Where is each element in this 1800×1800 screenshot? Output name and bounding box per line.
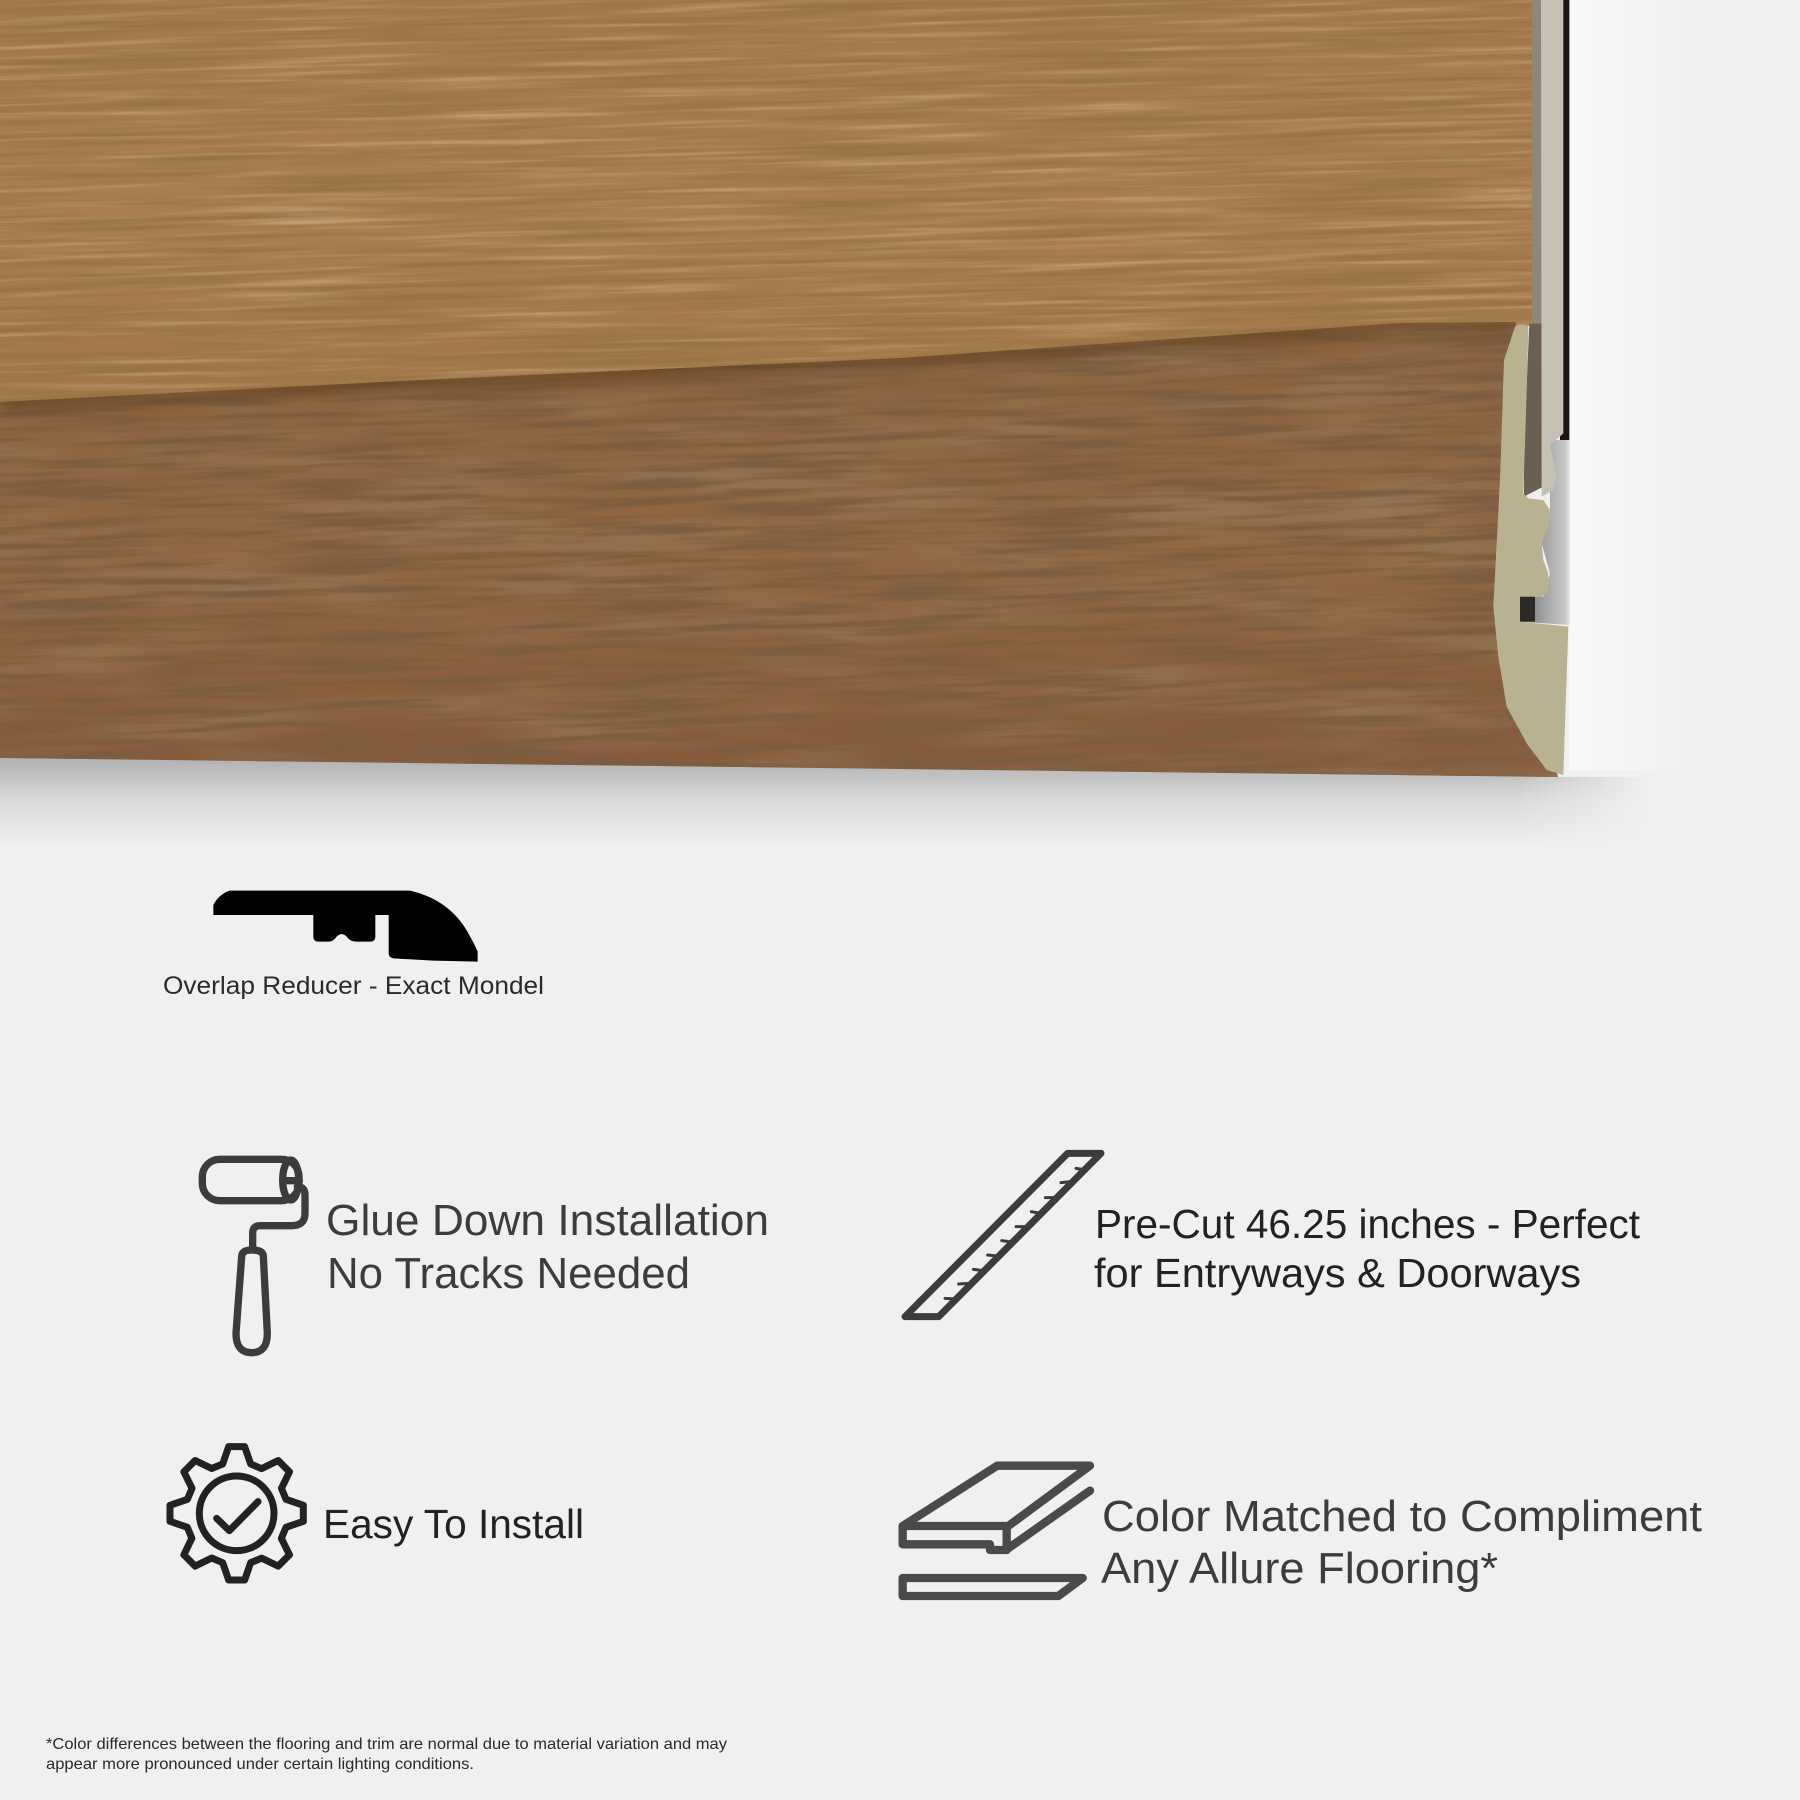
- trim end cut: [1493, 324, 1568, 775]
- photo backdrop light and shadow: [0, 323, 1627, 830]
- feature text: glue down: Glue Down Installation: [326, 1196, 769, 1245]
- feature text: pre-cut: Pre-Cut 46.25 inches - Perfect: [1095, 1201, 1641, 1247]
- feature text: glue down: No Tracks Needed: [327, 1249, 690, 1298]
- feature text: easy install: Easy To Install: [323, 1501, 584, 1547]
- footnote: *Color differences between the flooring and trim are normal due to material variation and may: [46, 1736, 727, 1753]
- feature text: color matched: Any Allure Flooring*: [1101, 1544, 1498, 1593]
- feature text: pre-cut: for Entryways & Doorways: [1094, 1250, 1581, 1296]
- footnote: [46, 1736, 727, 1773]
- plank edge profile: [1520, 0, 1570, 625]
- feature text: color matched: [1101, 1492, 1702, 1593]
- icon: overlap reducer profile: [213, 891, 478, 962]
- icon: ruler: [905, 1153, 1101, 1317]
- icon: paint roller: [202, 1159, 305, 1353]
- profile caption: Overlap Reducer - Exact Mondel: [163, 972, 544, 1000]
- upper wood plank: [0, 0, 1532, 402]
- lower wood plank: [0, 322, 1558, 777]
- footnote: appear more pronounced under certain lighting conditions.: [46, 1756, 474, 1773]
- photo: flooring trim piece: [0, 0, 1700, 851]
- feature text: pre-cut: [1094, 1201, 1641, 1296]
- feature text: glue down: [326, 1196, 769, 1298]
- icon: flooring boards: [903, 1466, 1090, 1596]
- icon: gear with check: [170, 1447, 303, 1580]
- feature text: color matched: Color Matched to Compliment: [1102, 1492, 1702, 1541]
